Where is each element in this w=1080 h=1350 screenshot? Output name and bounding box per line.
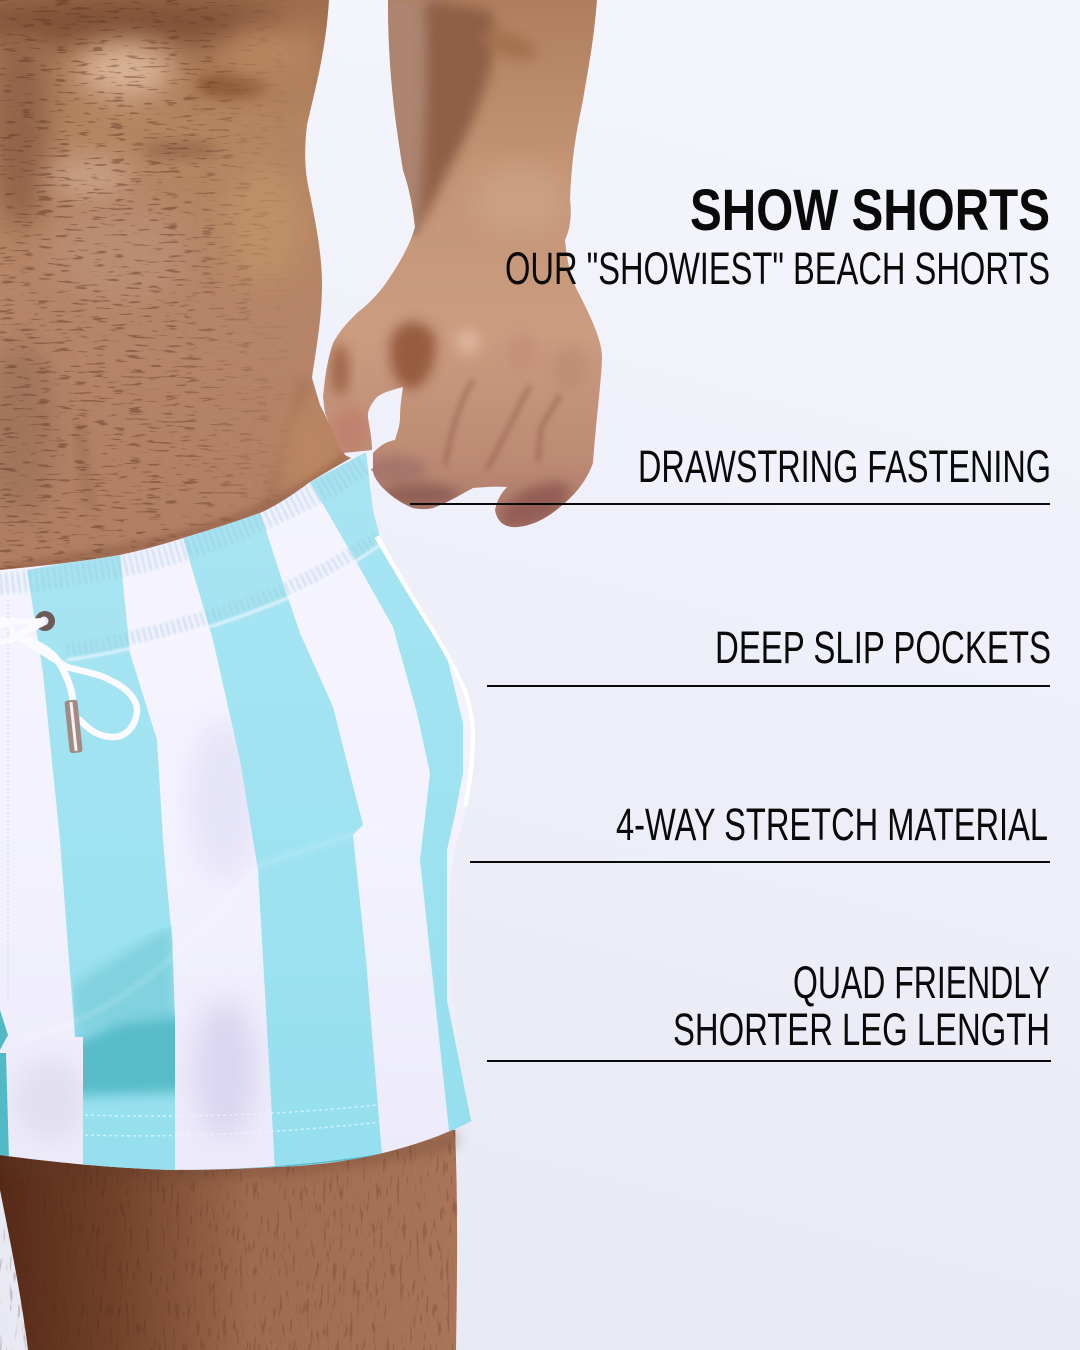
photo: striped shorts	[0, 440, 500, 1200]
icon: drawstring cord and eyelet	[0, 611, 137, 753]
trim and hem	[0, 536, 475, 1171]
stripe: left fold shade	[73, 925, 175, 1102]
photo: torso	[0, 0, 373, 570]
stripe: left	[27, 553, 175, 1175]
feature: quad friendly shorter leg length	[487, 957, 1051, 1062]
stripe: side	[310, 452, 473, 1140]
waistband gathers	[0, 464, 380, 660]
stripe: centre	[183, 512, 382, 1170]
stripe: far left edge	[0, 1010, 9, 1160]
photo: thigh	[0, 1130, 458, 1350]
photo: arm and hand	[323, 0, 602, 528]
